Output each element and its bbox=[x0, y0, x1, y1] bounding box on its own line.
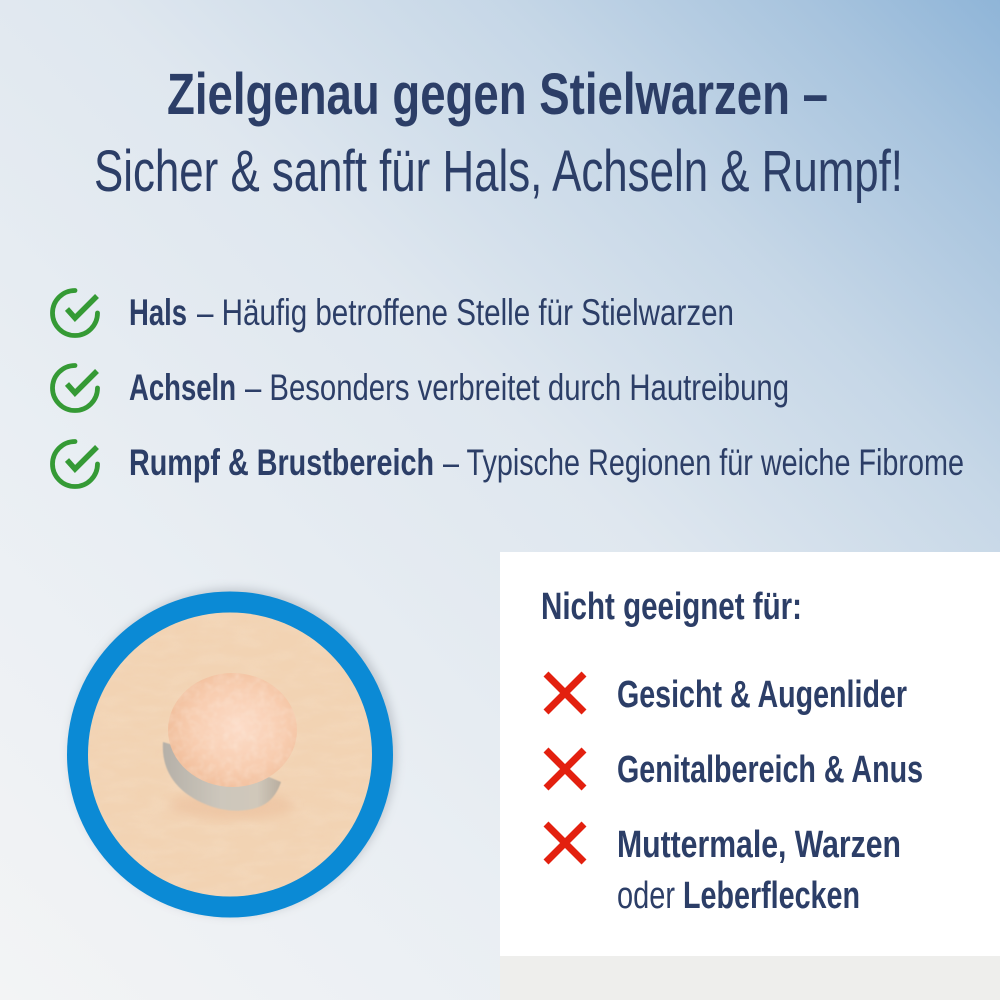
icon: cross 1 bbox=[546, 674, 584, 712]
text: Achseln: – Besonders verbreitet durch Hautreibung bbox=[245, 367, 789, 408]
text: Rumpf bbox=[129, 442, 964, 483]
icon: check Rumpf bbox=[53, 442, 98, 486]
text: Hals: – Häufig betroffene Stelle für Stielwarzen bbox=[197, 292, 734, 333]
title: Zielgenau gegen Stielwarzen – bbox=[167, 62, 828, 127]
icon: cross 2 bbox=[546, 750, 584, 788]
icon: check Achseln bbox=[53, 366, 98, 411]
list: suitable areas bbox=[53, 290, 964, 486]
text: Gesicht: Gesicht & Augenlider bbox=[617, 674, 907, 716]
text: Muttermale: Leberflecken bbox=[683, 875, 860, 917]
text: Hals: Hals bbox=[129, 292, 187, 333]
text: Rumpf: Rumpf & Brustbereich bbox=[129, 442, 434, 483]
icon: cross 3 bbox=[546, 824, 584, 862]
text: Muttermale: oder bbox=[617, 875, 675, 917]
text: Muttermale: Muttermale, Warzen bbox=[617, 824, 901, 866]
text: Muttermale bbox=[617, 824, 901, 917]
text: Achseln bbox=[129, 367, 789, 408]
icon: check Hals bbox=[53, 290, 98, 336]
panel: not suitable bbox=[500, 552, 1000, 956]
panel heading: Nicht geeignet für: bbox=[541, 586, 802, 628]
circle image: skin tag with ring bbox=[67, 589, 396, 918]
bottom strip bbox=[500, 956, 1000, 1000]
text: Achseln: Achseln bbox=[129, 367, 236, 408]
title bbox=[94, 62, 903, 204]
